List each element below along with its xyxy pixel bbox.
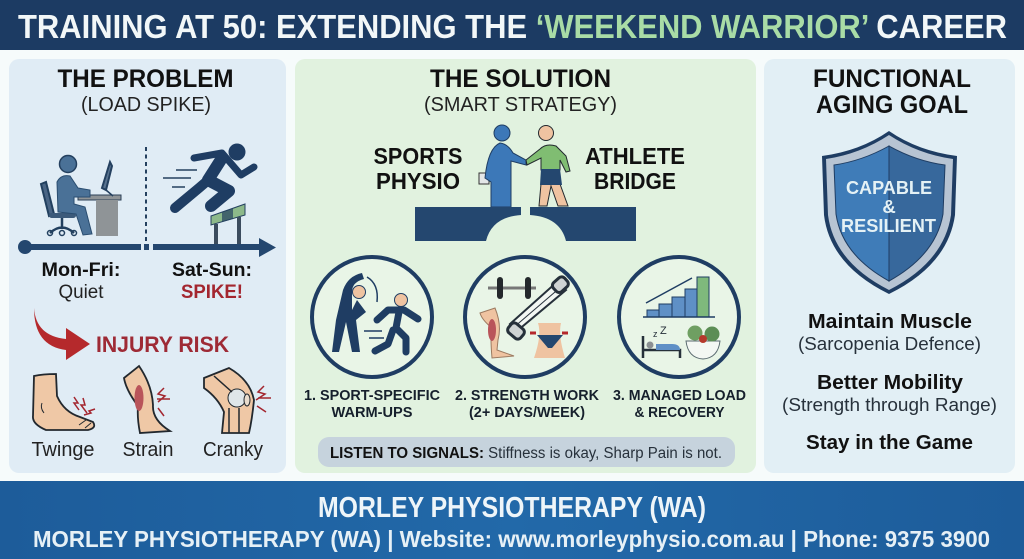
label: injury risk: INJURY RISK [96, 332, 229, 357]
footer banner [0, 481, 1024, 559]
header banner [0, 0, 1024, 50]
shield text: CAPABLE [846, 177, 932, 198]
heading: the problem: THE PROBLEM [58, 65, 234, 93]
icon: shield [822, 131, 957, 294]
labels: injury types: Twinge [32, 438, 94, 461]
label: athlete bridge: ATHLETE [585, 143, 685, 169]
heading: functional aging goal [813, 65, 971, 119]
heading: functional aging goal: AGING GOAL [816, 91, 968, 119]
callout: listen to signals: LISTEN TO SIGNALS: Stiffness is okay, Sharp Pain is not. [330, 445, 722, 462]
goal: better mobility: Better Mobility [817, 371, 964, 394]
label: managed load and recovery: 3. MANAGED LOAD [613, 387, 746, 404]
timeline arrow [18, 238, 276, 257]
heading: the solution: THE SOLUTION [430, 65, 611, 93]
callout: listen to signals [318, 437, 735, 467]
arrow: red curve [34, 308, 90, 360]
label: monday to friday: Quiet [58, 282, 104, 303]
label: athlete bridge: BRIDGE [594, 168, 676, 194]
goal: maintain muscle [798, 310, 981, 354]
panel: the solution [295, 59, 756, 473]
goal: better mobility: (Strength through Range) [782, 394, 997, 415]
goal: better mobility [782, 371, 997, 415]
footer title: MORLEY PHYSIOTHERAPY (WA) [318, 492, 706, 524]
panel: the problem [9, 59, 286, 473]
label: saturday and sunday: SPIKE! [181, 282, 243, 303]
icon: foot twinge [33, 374, 95, 430]
divider: weekday and weekend [145, 147, 147, 241]
icon: strength circle [465, 257, 585, 377]
label: sports physio: PHYSIO [376, 168, 460, 194]
icon: bridge [415, 207, 636, 241]
icon: load and recovery circle [619, 257, 739, 377]
heading: functional aging goal: FUNCTIONAL [813, 65, 971, 93]
label: monday to friday [42, 260, 120, 303]
shield text [841, 177, 937, 236]
label: strength work: (2+ DAYS/WEEK) [469, 404, 585, 421]
label: saturday and sunday: Sat-Sun: [172, 260, 252, 281]
icon: cranky knee [204, 368, 271, 433]
label: sport-specific warm-ups: WARM-UPS [332, 404, 412, 421]
label: managed load and recovery: & RECOVERY [634, 404, 724, 421]
icon: calf strain [124, 366, 170, 433]
goal: maintain muscle: (Sarcopenia Defence) [798, 333, 981, 354]
labels: injury types: Cranky [203, 438, 264, 461]
label: saturday and sunday [172, 260, 252, 303]
icon: load and recovery circle: Z [660, 325, 667, 337]
label: athlete bridge [585, 143, 685, 194]
title: TRAINING AT 50: EXTENDING THE ‘WEEKEND WARRIOR’ CAREER [18, 8, 1007, 45]
goal: stay in the game: Stay in the Game [806, 431, 973, 454]
goal: maintain muscle: Maintain Muscle [808, 310, 972, 333]
label: managed load and recovery [613, 387, 746, 421]
icon: sprinter over hurdle [163, 144, 254, 244]
icon: warm-up circle [312, 257, 432, 377]
label: strength work [455, 387, 599, 421]
labels: injury types: Strain [122, 438, 174, 461]
labels: injury types [32, 438, 264, 461]
panel: functional aging goal [764, 59, 1015, 473]
label: monday to friday: Mon-Fri: [42, 260, 120, 281]
label: sport-specific warm-ups: 1. SPORT-SPECIFIC [304, 387, 440, 404]
label: strength work: 2. STRENGTH WORK [455, 387, 599, 404]
label: sports physio: SPORTS [374, 143, 462, 169]
shield text: RESILIENT [841, 215, 937, 236]
label: sports physio [374, 143, 462, 194]
subheading: smart strategy: (SMART STRATEGY) [424, 93, 617, 116]
icon: load and recovery circle: z [653, 329, 658, 339]
subheading: load spike: (LOAD SPIKE) [81, 93, 211, 116]
shield text: & [882, 196, 896, 217]
icon: desk worker [41, 156, 121, 236]
icon: handshake [479, 125, 570, 207]
footer contact details: MORLEY PHYSIOTHERAPY (WA) | Website: www.morleyphysio.com.au | Phone: 9375 3900 [33, 526, 990, 552]
label: sport-specific warm-ups [304, 387, 440, 421]
